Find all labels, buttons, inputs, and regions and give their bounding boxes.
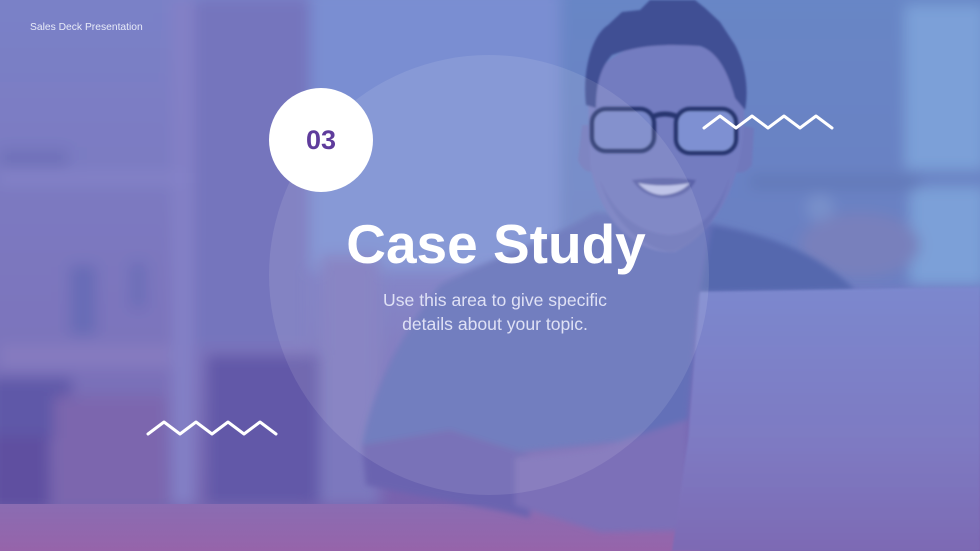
- table: [0, 504, 700, 551]
- face: [588, 42, 744, 252]
- title: Case Study: [346, 213, 646, 275]
- description text: Use this area to give specific: [383, 290, 607, 310]
- glasses: [592, 109, 736, 153]
- number badge: 03: [306, 125, 336, 155]
- mouth: [632, 178, 696, 198]
- description text: [383, 290, 607, 334]
- number badge: [269, 88, 373, 192]
- laptop: [672, 287, 980, 551]
- person: [362, 212, 855, 532]
- ears: [578, 125, 595, 172]
- hair: [585, 0, 747, 110]
- header label: Sales Deck Presentation: [30, 22, 143, 33]
- description text: details about your topic.: [402, 314, 588, 334]
